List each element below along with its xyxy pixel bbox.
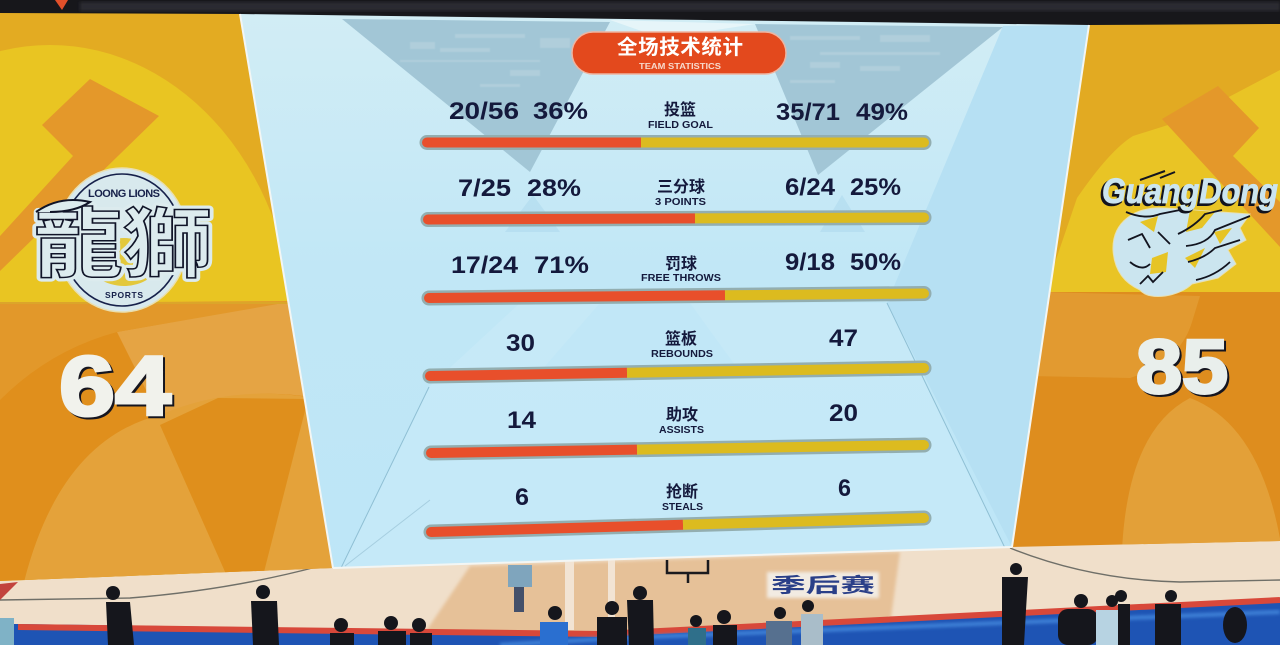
logo: Loong Lions: 龍獅 bbox=[34, 203, 212, 288]
panel: central statistics background bbox=[230, 10, 1100, 580]
stat row: free throws: 50% bbox=[850, 249, 901, 276]
stat row: rebounds: 篮板 bbox=[665, 329, 697, 348]
stat row: free throws: 9/18 bbox=[785, 249, 835, 276]
score: Loong Lions 64: 64 bbox=[61, 341, 173, 435]
logo: GuangDong bbox=[1100, 171, 1278, 297]
stat row: field goal: 49% bbox=[856, 99, 908, 126]
title pill bbox=[572, 32, 786, 74]
stat row: field goal bbox=[422, 98, 929, 148]
crowd window left bbox=[342, 19, 610, 172]
logo: Loong Lions bbox=[34, 168, 212, 312]
faint reflected triangles bbox=[505, 195, 865, 232]
stat row: 3 points: 6/24 bbox=[785, 174, 835, 201]
title pill: 全场技术统计 bbox=[617, 35, 743, 59]
stat row: free throws: 罚球 bbox=[665, 255, 697, 273]
stat row: assists: 助攻 bbox=[666, 406, 698, 424]
stat row: assists: 20 bbox=[829, 400, 858, 427]
stat row: 3 points: 25% bbox=[850, 174, 901, 201]
logo: Loong Lions: SPORTS bbox=[105, 290, 143, 300]
score: GuangDong 85: 85 bbox=[1138, 327, 1230, 412]
panel: right team background bbox=[1000, 20, 1280, 552]
stat row: steals: 6 bbox=[515, 484, 529, 511]
panel: left team background bbox=[0, 13, 332, 581]
score: Loong Lions 64: 64 bbox=[59, 339, 171, 433]
pale pyramid lower area bbox=[341, 303, 1005, 568]
score: GuangDong 85: 85 bbox=[1136, 325, 1228, 410]
title pill: TEAM STATISTICS bbox=[639, 62, 722, 71]
stat row: field goal: 20/56 bbox=[449, 98, 519, 125]
floor logo: 季后赛 bbox=[771, 573, 875, 597]
panel edges bbox=[240, 14, 1089, 568]
stat row: rebounds: 30 bbox=[506, 330, 535, 357]
stat row: steals bbox=[426, 475, 929, 537]
stat row: steals: 6 bbox=[838, 475, 851, 502]
stat row: steals: STEALS bbox=[662, 502, 703, 513]
stat row: assists: 14 bbox=[507, 407, 536, 434]
stat row: 3 points: 3 POINTS bbox=[655, 197, 706, 208]
courtside people bbox=[0, 563, 1247, 645]
arena floor bbox=[0, 535, 1280, 645]
stat row: steals: 抢断 bbox=[666, 482, 698, 501]
logo: Loong Lions: 龍獅 bbox=[34, 203, 212, 288]
stat row: free throws bbox=[424, 249, 929, 303]
stat row: 3 points: 7/25 bbox=[458, 175, 511, 202]
stat row: assists: ASSISTS bbox=[659, 425, 704, 436]
stat row: free throws: 71% bbox=[534, 252, 589, 279]
stat row: 3 points bbox=[423, 174, 929, 224]
stat row: field goal: 35/71 bbox=[776, 99, 840, 126]
stat row: rebounds: 47 bbox=[829, 325, 858, 352]
camera tripod bbox=[667, 560, 708, 583]
stat row: 3 points: 28% bbox=[527, 175, 581, 202]
stat row: free throws: 17/24 bbox=[451, 252, 518, 279]
stat row: assists bbox=[426, 400, 929, 458]
stat row: rebounds bbox=[425, 325, 929, 381]
stat row: field goal: FIELD GOAL bbox=[648, 120, 713, 131]
stat row: rebounds: REBOUNDS bbox=[651, 349, 713, 360]
crowd window right bbox=[755, 24, 1003, 175]
stat row: 3 points: 三分球 bbox=[657, 178, 705, 196]
floor logo bbox=[767, 572, 879, 598]
stat row: field goal: 36% bbox=[533, 98, 588, 125]
arena top band bbox=[0, 0, 1280, 30]
stat row: free throws: FREE THROWS bbox=[641, 273, 721, 284]
logo: Loong Lions: LOONG LIONS bbox=[88, 188, 160, 200]
stat row: field goal: 投篮 bbox=[664, 100, 696, 119]
